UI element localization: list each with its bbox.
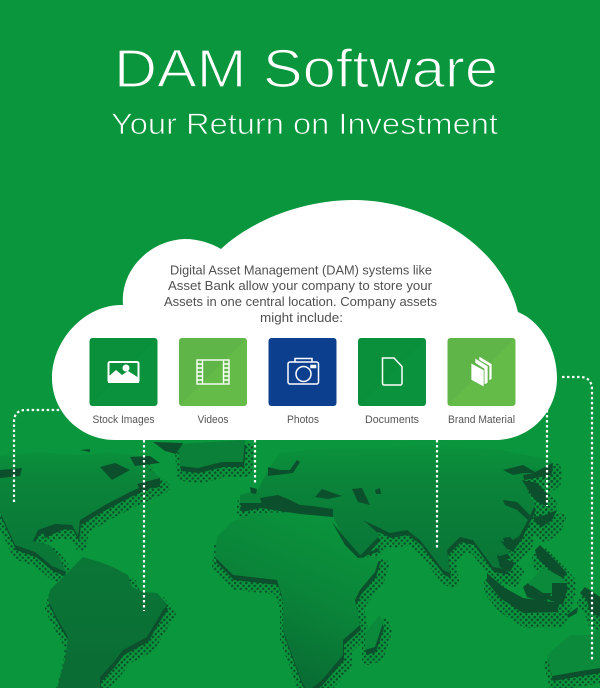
world map xyxy=(0,440,600,688)
connector: stock images xyxy=(14,410,64,502)
borneo xyxy=(528,568,567,596)
intro text: Asset Bank allow your company to store your xyxy=(168,279,433,293)
label: videos: Videos xyxy=(198,414,229,426)
south america xyxy=(48,557,167,688)
intro text: Assets in one central location. Company assets xyxy=(164,295,437,309)
icon: film strip xyxy=(197,360,229,384)
tile: documents xyxy=(358,338,426,426)
tile: videos xyxy=(179,338,247,426)
intro text: Digital Asset Management (DAM) systems like xyxy=(170,264,432,278)
continents xyxy=(0,440,600,688)
icon: stacked pages xyxy=(471,356,492,387)
label: brand material: Brand Material xyxy=(448,414,515,426)
label: stock images: Stock Images xyxy=(92,414,155,426)
tile: photos xyxy=(268,338,336,426)
halftone shadow xyxy=(3,449,600,688)
icon: document xyxy=(382,358,402,385)
greenland xyxy=(178,440,245,468)
extruded coast shadow xyxy=(1,445,600,688)
label: photos: Photos xyxy=(287,414,319,426)
north america xyxy=(0,452,161,572)
tile: brand material xyxy=(448,338,516,426)
title: DAM Software xyxy=(114,39,498,99)
australia xyxy=(547,628,600,676)
africa xyxy=(215,512,380,688)
eurasia xyxy=(240,445,552,573)
subtitle: Your Return on Investment xyxy=(111,108,499,141)
intro text: might include: xyxy=(260,311,343,325)
intro text xyxy=(164,264,437,325)
connector: videos xyxy=(143,440,145,611)
seas and dark coast detail xyxy=(0,442,600,618)
connector: brand material xyxy=(546,410,548,506)
tile: stock images xyxy=(90,338,158,426)
dotted connector lines xyxy=(14,377,592,660)
connector: photos xyxy=(254,440,256,484)
icon: picture xyxy=(108,362,139,383)
cloud panel xyxy=(52,200,557,440)
connector: far right xyxy=(562,377,592,660)
label: documents: Documents xyxy=(365,414,419,426)
connector: documents xyxy=(436,440,438,550)
icon: camera xyxy=(288,358,318,384)
madagascar xyxy=(365,615,383,650)
